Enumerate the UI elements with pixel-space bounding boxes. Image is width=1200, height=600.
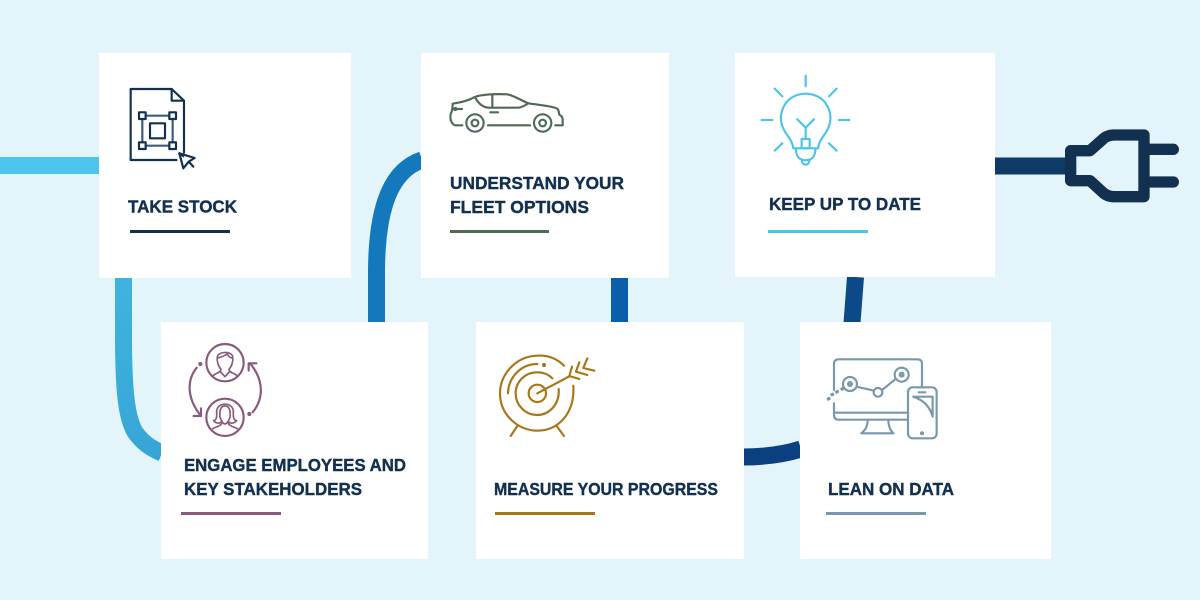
- underline: [495, 512, 595, 515]
- panel: engage employees and key stakeholders: [161, 322, 428, 559]
- icon: car: [450, 94, 563, 132]
- icon: monitor and phone: [828, 359, 937, 438]
- panel: measure your progress: [476, 322, 744, 559]
- panel: keep up to date: [735, 53, 995, 277]
- heading: TAKE STOCK: [128, 196, 237, 216]
- icon: plug: [1071, 135, 1173, 197]
- underline: [768, 230, 868, 233]
- heading: KEEP UP TO DATE: [769, 194, 921, 214]
- connecting cable: [0, 160, 1068, 457]
- panel: understand your fleet options: [421, 53, 669, 278]
- icon: target and arrow: [500, 356, 594, 436]
- underline: [826, 512, 926, 515]
- underline: [130, 230, 230, 233]
- panel: lean on data: [800, 322, 1051, 559]
- heading line 2: FLEET OPTIONS: [450, 197, 589, 217]
- icon: people exchange: [190, 344, 261, 436]
- underline: [450, 230, 549, 233]
- heading: UNDERSTAND YOUR: [450, 173, 624, 193]
- heading: LEAN ON DATA: [828, 479, 954, 499]
- icon: document selection: [131, 89, 195, 168]
- panel: take stock: [99, 53, 351, 278]
- heading line 2: KEY STAKEHOLDERS: [184, 479, 362, 499]
- heading: ENGAGE EMPLOYEES AND: [184, 455, 406, 475]
- icon: light bulb: [762, 76, 849, 165]
- heading: MEASURE YOUR PROGRESS: [494, 479, 718, 499]
- underline: [181, 512, 281, 515]
